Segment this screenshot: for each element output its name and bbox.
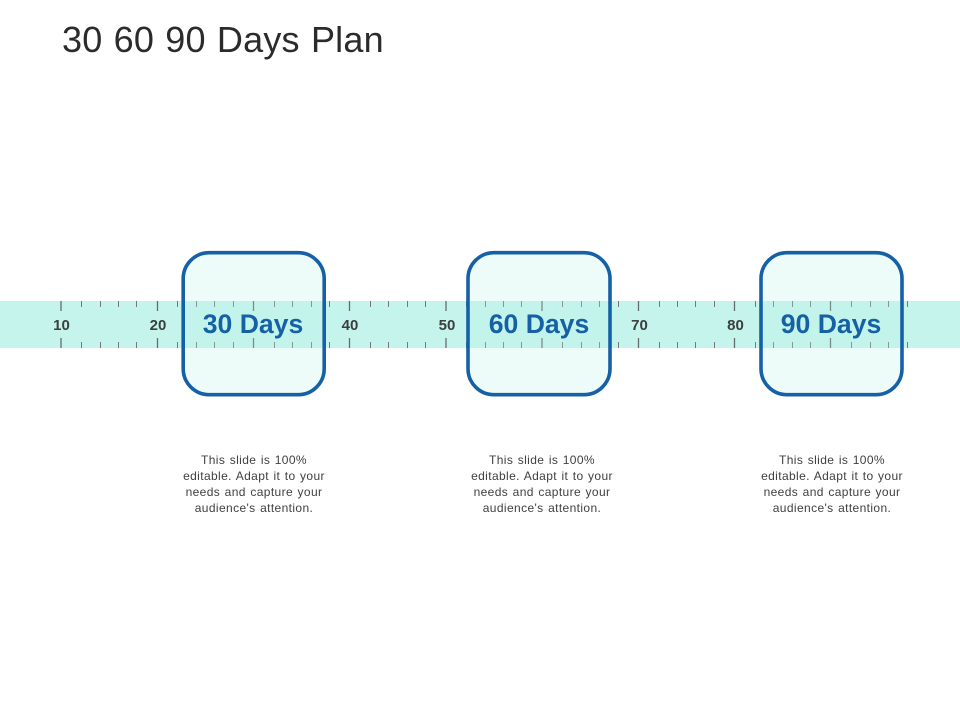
description: 90 days: audience's attention.	[773, 501, 891, 515]
major ticks	[61, 301, 830, 348]
box: 60 days: 60 Days	[489, 309, 589, 339]
description: 90 days	[761, 453, 903, 515]
description: 90 days: This slide is 100%	[779, 453, 885, 467]
box: 30 days	[183, 253, 324, 395]
description: 60 days: audience's attention.	[483, 501, 601, 515]
description: 60 days	[471, 453, 613, 515]
description: 30 days: This slide is 100%	[201, 453, 307, 467]
description: 30 days: needs and capture your	[186, 485, 322, 499]
description: 90 days: editable. Adapt it to your	[761, 469, 903, 483]
box: 60 days	[468, 253, 610, 395]
box: 30 days: 30 Days	[203, 309, 303, 339]
ruler numbers: 20	[150, 317, 166, 334]
description: 30 days	[183, 453, 325, 515]
ruler numbers: 40	[342, 317, 358, 334]
ruler numbers: 80	[727, 317, 744, 334]
description: 60 days: needs and capture your	[474, 485, 610, 499]
box: 90 days: 90 Days	[781, 309, 881, 339]
description: 30 days: editable. Adapt it to your	[183, 469, 325, 483]
ruler numbers: 50	[439, 317, 455, 334]
ruler band	[0, 301, 960, 348]
ruler numbers: 10	[53, 317, 70, 334]
description: 60 days: editable. Adapt it to your	[471, 469, 613, 483]
ruler numbers	[53, 317, 744, 334]
description: 90 days: needs and capture your	[764, 485, 900, 499]
ruler numbers: 70	[631, 317, 648, 334]
minor ticks	[82, 301, 908, 348]
description: 30 days: audience's attention.	[195, 501, 313, 515]
box: 90 days	[761, 253, 902, 395]
title: 30 60 90 Days Plan	[62, 19, 384, 60]
description: 60 days: This slide is 100%	[489, 453, 595, 467]
